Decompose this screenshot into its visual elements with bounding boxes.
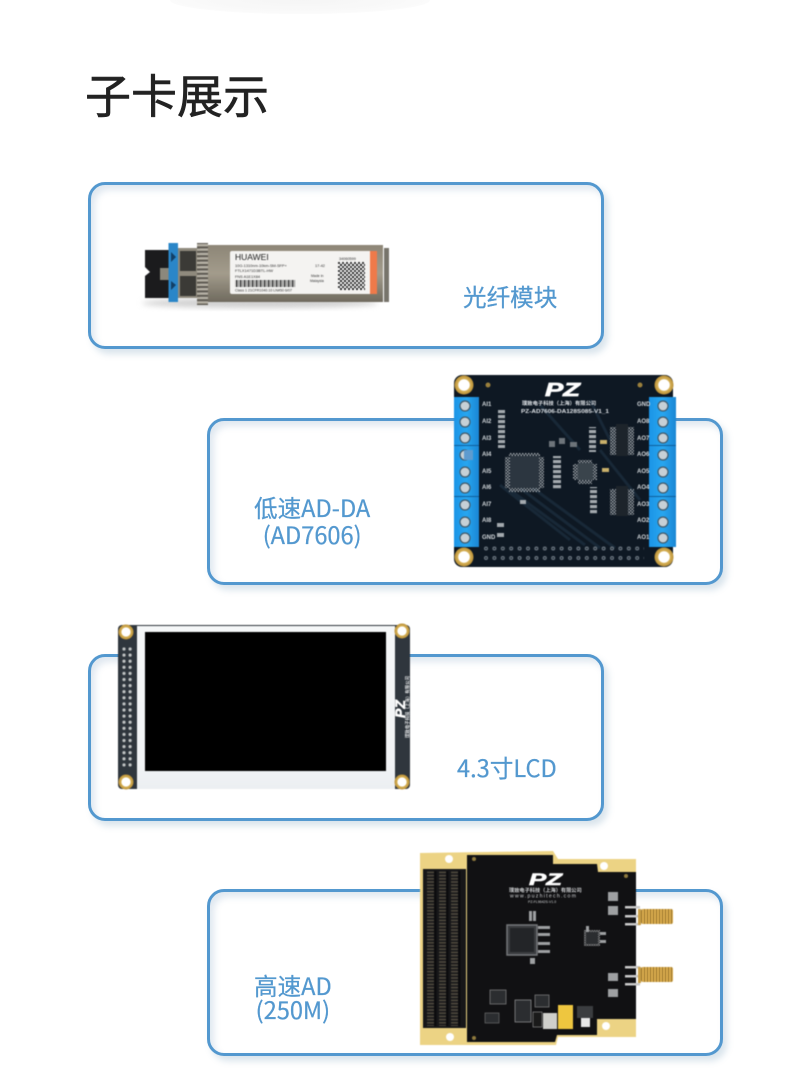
- sub: main chips: [505, 424, 634, 516]
- label: fiber module: 光纤模块: [463, 279, 557, 313]
- sub: terminal pin labels: AO1: [637, 535, 650, 541]
- image: 4.3 inch LCD: [117, 622, 411, 790]
- label: low speed AD-DA: [254, 490, 370, 551]
- sub: terminal pin labels: AO7: [637, 436, 650, 442]
- sub: black dust plug: [145, 250, 174, 298]
- sub: terminal pin labels: AO6: [637, 452, 650, 458]
- sub: chips: [485, 925, 600, 1029]
- label: low speed AD-DA: 低速AD-DA: [254, 490, 370, 524]
- sub: gold frame: [420, 851, 636, 1045]
- sub: mounting holes: [454, 376, 674, 566]
- sub: terminal pin labels: AI2: [482, 419, 492, 425]
- image: SFP fiber module: [144, 242, 390, 310]
- sub: terminal pin labels: AI7: [482, 502, 492, 508]
- sub: board silk text: www.puzhitech.com: [510, 894, 576, 900]
- sub: terminal pin labels: AI8: [482, 518, 492, 524]
- label: high speed AD: (250M): [256, 992, 330, 1026]
- sub: terminal pin labels: AO4: [637, 485, 650, 491]
- sub: vertical silk text: 璞致电子科技（上海）有限公司: [404, 676, 411, 738]
- sub: terminal pin labels: GND: [637, 402, 651, 408]
- sub: terminal pin labels: AO5: [637, 469, 650, 475]
- sub: passive components: [529, 892, 618, 997]
- sub: terminal pin labels: AO8: [637, 419, 650, 425]
- sub: terminal pin labels: AI6: [482, 485, 492, 491]
- sub: product label: Malaysia: [310, 279, 324, 283]
- sub: product label: FNS A1E1X84: [235, 274, 261, 279]
- sub: terminal pin labels: GND: [482, 535, 496, 541]
- sub: left terminal block: [454, 397, 479, 547]
- label: 4.3 inch LCD: 4.3寸LCD: [457, 750, 557, 784]
- sub: black screen: [145, 632, 386, 771]
- sub: board silk text: 璞致电子科技（上海）有限公司: [522, 399, 596, 407]
- panel: 4.3 inch LCD: [88, 654, 604, 821]
- title: 子卡展示: [85, 61, 269, 127]
- sub: right terminal block: [649, 397, 676, 547]
- sub: terminal pin labels: [482, 402, 651, 541]
- sub: terminal pin labels: AO2: [637, 518, 650, 524]
- sub: product label: 10G-1310nm-10km-SM-SFP+: [235, 263, 288, 268]
- label: low speed AD-DA: (AD7606): [263, 517, 362, 551]
- sub: blue latch: [168, 243, 178, 302]
- label: high speed AD: [254, 968, 332, 1026]
- sub: board silk text: [521, 399, 609, 415]
- sub: terminal pin labels: AI3: [482, 436, 492, 442]
- sub: terminal pin labels: AO3: [637, 502, 650, 508]
- sub: black PCB: [467, 855, 636, 1042]
- sub: board connector: [423, 869, 466, 1028]
- sub: traces: [500, 400, 640, 548]
- sub: PZ logo: PZ: [529, 870, 563, 889]
- sub: board silk text: PZ-FL9642S-V1.0: [528, 900, 556, 904]
- panel: fiber module: [88, 182, 604, 349]
- sub: PCB: [454, 375, 673, 567]
- sub: PZ logo: PZ: [392, 700, 408, 718]
- sub: terminal pin labels: AI4: [482, 452, 492, 458]
- sub: board silk text: [509, 886, 582, 904]
- sub: board silk text: 璞致电子科技（上海）有限公司: [509, 886, 582, 894]
- sub: white bezel: [137, 626, 395, 789]
- sub: mounting holes: [118, 624, 410, 790]
- image: high speed AD card: [419, 850, 674, 1046]
- image: AD7606 board: [453, 374, 677, 568]
- sub: terminal pin labels: AI1: [482, 402, 492, 408]
- sub: PZ logo: PZ: [545, 380, 582, 400]
- sub: frame holes: [445, 855, 628, 1041]
- sub: product label: 34060599: [339, 257, 356, 261]
- label: high speed AD: 高速AD: [254, 968, 332, 1002]
- panel: high speed AD: [207, 889, 723, 1056]
- sub: pin header: [121, 646, 133, 768]
- panel: low speed AD-DA: [207, 418, 723, 585]
- sub: product label: HUAWEI: [235, 252, 269, 262]
- sub: SMA connectors: [625, 906, 673, 986]
- sub: product label: [230, 251, 377, 294]
- sub: product label: Made in: [311, 274, 324, 278]
- sub: board silk text: PZ-AD7606-DA128S085-V1_1: [521, 409, 609, 415]
- sub: pin header: [482, 544, 644, 563]
- sub: terminal pin labels: AI5: [482, 469, 492, 475]
- sub: product label: 17-42: [315, 263, 325, 268]
- sub: product label: Class 1 21CFR1040.10 LN#50 6/07: [235, 288, 292, 292]
- sub: product label: FTLX1471D3BTL-HW: [235, 268, 273, 273]
- sub: PCB: [118, 625, 410, 789]
- sub: metal cage: [178, 243, 389, 305]
- sub: passive components: [497, 410, 609, 537]
- top fade shadow: [170, 0, 430, 14]
